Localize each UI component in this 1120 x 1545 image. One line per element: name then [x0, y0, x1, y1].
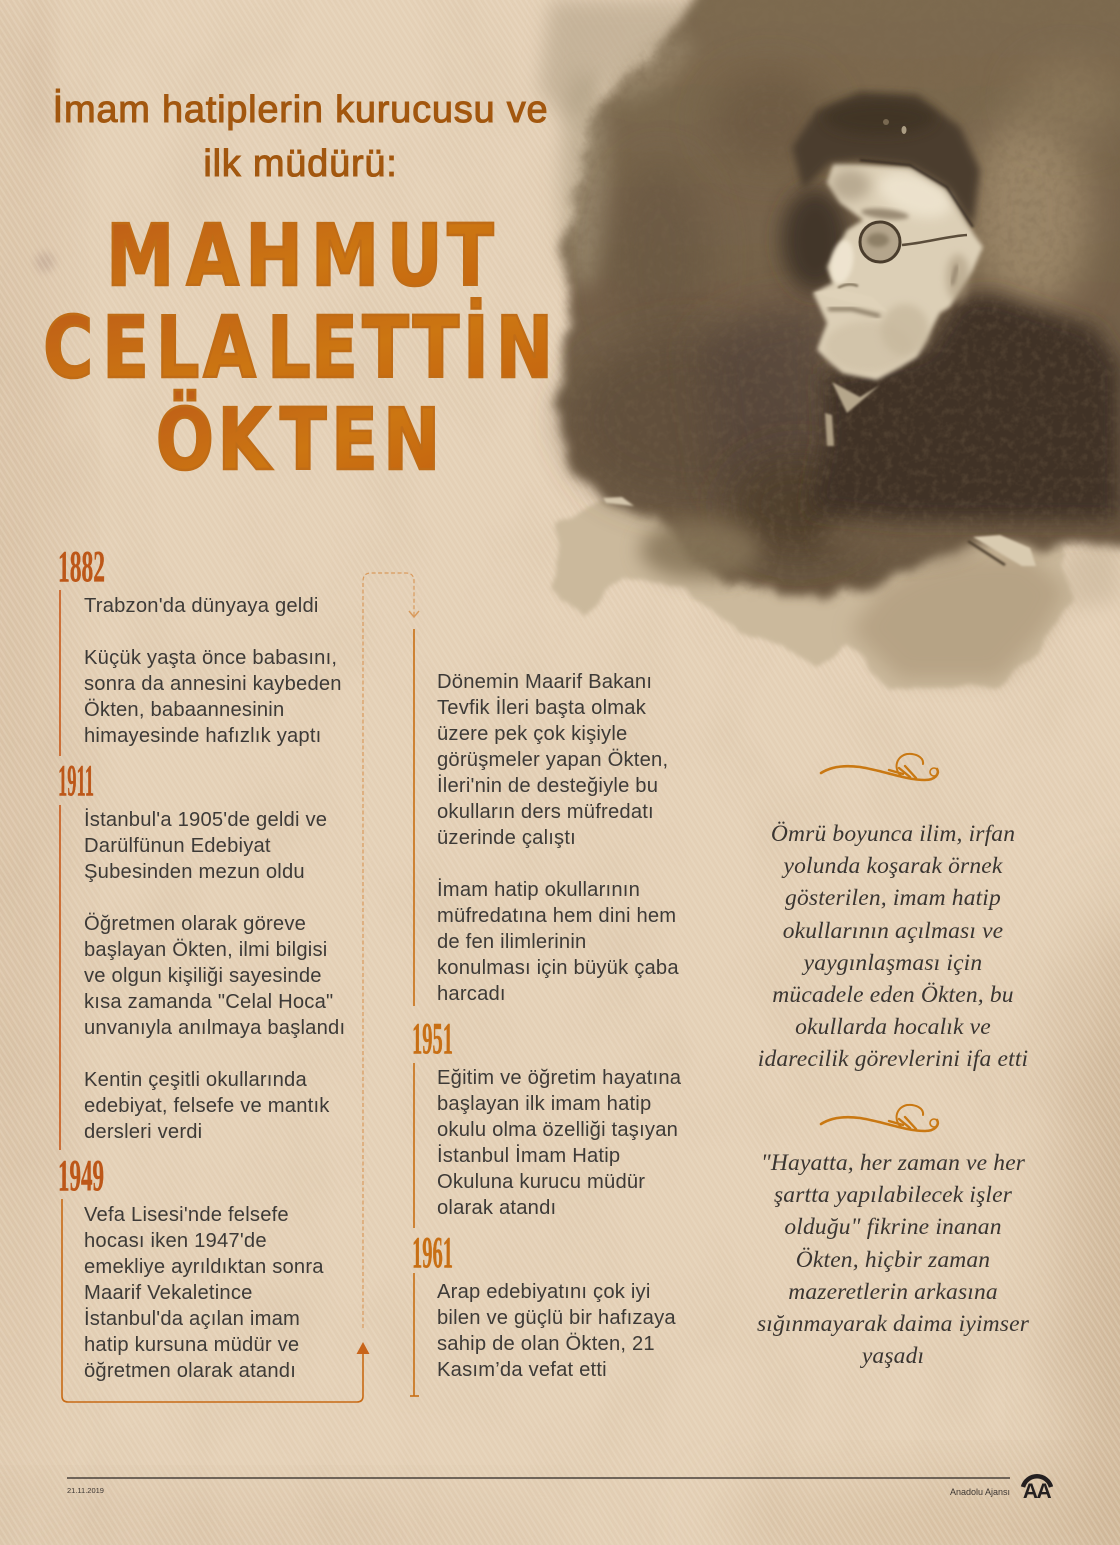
main title: Mahmut Celalettin Ökten [43, 208, 553, 490]
quote 1: Ömrü boyunca ilim, irfan [771, 821, 1015, 847]
year 1949: 1949 [58, 1151, 104, 1200]
text ministry work: de fen ilimlerinin [437, 931, 586, 953]
text ministry work: Dönemin Maarif Bakanı [437, 671, 652, 693]
right shoulder wash [850, 554, 1068, 680]
text 1911: Şubesinden mezun oldu [84, 861, 305, 883]
quote 2: şartta yapılabilecek işler [774, 1182, 1012, 1208]
beard [824, 321, 912, 373]
ornament top [821, 754, 938, 780]
arrow down [409, 611, 419, 617]
dashed connector [363, 573, 414, 1328]
text ministry work: İmam hatip okullarının [437, 879, 640, 901]
quote 1: yaygınlaşması için [804, 950, 982, 976]
nose highlight [827, 238, 857, 286]
text 1911: Öğretmen olarak göreve [84, 913, 306, 935]
eye [867, 233, 889, 247]
background and portrait artwork: 1961 [412, 1228, 453, 1277]
text 1949: Maarif Vekaletince [84, 1282, 253, 1304]
hat [792, 92, 980, 227]
quote 1 [758, 821, 1028, 1072]
text 1961: bilen ve güçlü bir hafızaya [437, 1307, 676, 1329]
lower clothing wash [551, 497, 1073, 687]
text 1949: hocası iken 1947'de [84, 1230, 267, 1252]
text 1911: unvanıyla anılmaya başlandı [84, 1017, 345, 1039]
text ministry work [437, 671, 679, 1005]
text ministry work: üzerinde çalıştı [437, 827, 576, 849]
year 1882: 1882 [58, 542, 105, 591]
text 1951: okulu olma özelliği taşıyan [437, 1119, 678, 1141]
text 1911: İstanbul'a 1905'de geldi ve [84, 809, 327, 831]
dark photo background [558, 0, 1120, 597]
text 1951: İstanbul İmam Hatip [437, 1145, 620, 1167]
quote 1: okullarda hocalık ve [795, 1014, 991, 1040]
heading line 1: İmam hatiplerin kurucusu ve [53, 89, 548, 131]
lit halo behind head [970, 115, 1090, 315]
text 1882: Küçük yaşta önce babasını, [84, 647, 337, 669]
text 1911: dersleri verdi [84, 1121, 202, 1143]
moustache and mouth [813, 289, 888, 312]
text 1961 [437, 1281, 676, 1381]
text ministry work: Tevfik İleri başta olmak [437, 697, 646, 719]
quote 2 [757, 1150, 1029, 1369]
heading line 2: ilk müdürü: [203, 143, 398, 185]
text ministry work: üzere pek çok kişiyle [437, 723, 627, 745]
title line: ÖKTEN: ÖKTEN [156, 389, 440, 490]
quote 2: Ökten, hiçbir zaman [796, 1247, 990, 1273]
text 1911: ve olgun kişiliği sayesinde [84, 965, 322, 987]
background and portrait artwork: 1951 [412, 1014, 453, 1063]
arrow up [356, 1342, 370, 1354]
date: 21.11.2019 [67, 1486, 104, 1495]
quote 1: idarecilik görevlerini ifa etti [758, 1046, 1028, 1072]
text 1961: Arap edebiyatını çok iyi [437, 1281, 651, 1303]
portrait photograph [500, 0, 1120, 687]
glasses [860, 222, 900, 262]
text 1911: başlayan Ökten, ilmi bilgisi [84, 939, 327, 961]
text 1911: edebiyat, felsefe ve mantık [84, 1095, 330, 1117]
year labels: 1911 [58, 756, 94, 805]
left cuff [603, 497, 634, 506]
text 1949: Vefa Lisesi'nde felsefe [84, 1204, 289, 1226]
gray hair and brow [830, 169, 870, 201]
text ministry work: müfredatına hem dini hem [437, 905, 676, 927]
text 1911: Darülfünun Edebiyat [84, 835, 271, 857]
agency name: Anadolu Ajansı [950, 1487, 1010, 1497]
quote 1: gösterilen, imam hatip [785, 885, 1001, 911]
film mottling [578, 56, 1115, 533]
text 1949: hatip kursuna müdür ve [84, 1334, 299, 1356]
dark left torso [570, 335, 810, 505]
text 1949 [84, 1204, 324, 1382]
text 1911: kısa zamanda "Celal Hoca" [84, 991, 333, 1013]
coat [810, 293, 1120, 520]
text ministry work: okulların ders müfredatı [437, 801, 654, 823]
text 1882: Trabzon'da dünyaya geldi [84, 595, 319, 617]
text 1882: himayesinde hafızlık yaptı [84, 725, 321, 747]
text 1951: başlayan ilk imam hatip [437, 1093, 651, 1115]
quote 2: sığınmayarak daima iyimser [757, 1311, 1029, 1337]
timeline lines left column [60, 590, 363, 1402]
hat brim line [860, 160, 973, 227]
Anadolu Agency logo: AA [1023, 1480, 1051, 1503]
lower mottled area [640, 520, 760, 580]
text 1882: sonra da annesini kaybeden [84, 673, 342, 695]
text 1911: Kentin çeşitli okullarında [84, 1069, 307, 1091]
ornament bottom [821, 1105, 938, 1131]
quote 2: "Hayatta, her zaman ve her [761, 1150, 1025, 1176]
text 1882: Ökten, babaannesinin [84, 699, 284, 721]
text 1882 [84, 595, 342, 747]
year labels [58, 542, 453, 1277]
text 1951: Eğitim ve öğretim hayatına [437, 1067, 681, 1089]
quote 1: mücadele eden Ökten, bu [772, 982, 1014, 1008]
footer rule [67, 1477, 1010, 1479]
quote 2: olduğu" fikrine inanan [784, 1214, 1002, 1240]
text 1951: olarak atandı [437, 1197, 556, 1219]
quote 2: mazeretlerin arkasına [788, 1279, 998, 1305]
text 1961: sahip de olan Ökten, 21 [437, 1333, 655, 1355]
right cheek shading [946, 254, 970, 302]
quote 1: okullarının açılması ve [783, 918, 1003, 944]
right cuff [973, 535, 1036, 566]
text 1949: İstanbul'da açılan imam [84, 1308, 300, 1330]
text 1949: emekliye ayrıldıktan sonra [84, 1256, 324, 1278]
title line: MAHMUT: MAHMUT [106, 208, 494, 306]
text 1961: Kasım’da vefat etti [437, 1359, 607, 1381]
face [813, 163, 983, 380]
text ministry work: İleri'nin de desteğiyle bu [437, 775, 658, 797]
text ministry work: görüşmeler yapan Ökten, [437, 749, 668, 771]
quote 2: yaşadı [862, 1343, 924, 1369]
timeline lines middle column [410, 629, 419, 1396]
text ministry work: harcadı [437, 983, 506, 1005]
shirt collar [832, 382, 880, 413]
title line: CELALETTİN: CELALETTİN [43, 297, 553, 398]
text 1951 [437, 1067, 681, 1219]
quote 1: yolunda koşarak örnek [784, 853, 1002, 879]
text 1911 [84, 808, 345, 1143]
upper left wash [540, 0, 740, 125]
faded left edge [561, 70, 609, 290]
text 1949: öğretmen olarak atandı [84, 1360, 296, 1382]
nostril [838, 284, 858, 288]
text 1951: Okuluna kurucu müdür [437, 1171, 645, 1193]
forehead highlight [872, 163, 958, 227]
face shadow [781, 188, 849, 292]
text ministry work: konulması için büyük çaba [437, 957, 679, 979]
